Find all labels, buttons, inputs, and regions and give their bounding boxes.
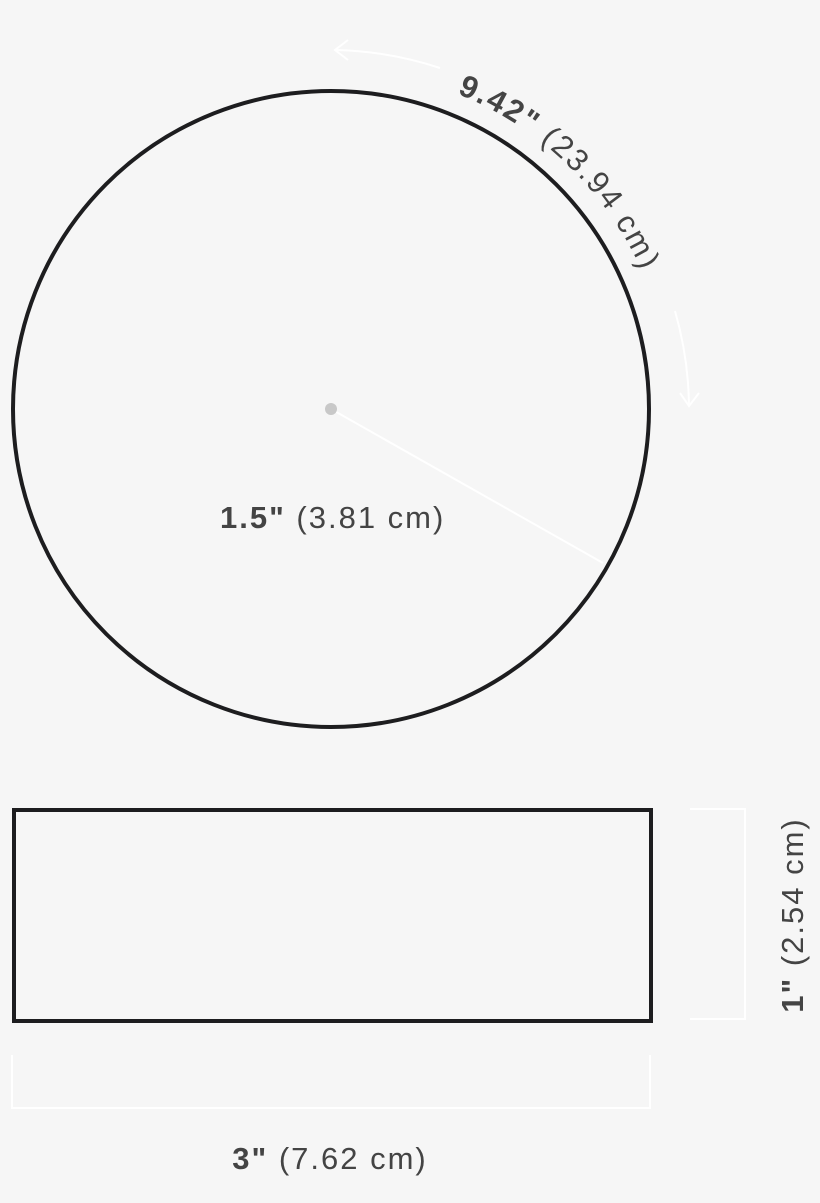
height label: 1" (2.54 cm): [775, 817, 810, 1013]
width label: 3" (7.62 cm): [232, 1141, 428, 1176]
circle outline: [13, 91, 649, 727]
arrow: top (counter-clockwise): [335, 40, 440, 68]
height bracket: [690, 809, 745, 1019]
radius label: 1.5" (3.81 cm): [220, 500, 445, 535]
width bracket: [12, 1055, 650, 1108]
radius line: [325, 403, 603, 563]
circumference label: 9.42" (23.94 cm): [460, 76, 659, 268]
arrow: right (clockwise): [675, 311, 699, 406]
rectangle (side view): [14, 810, 651, 1021]
